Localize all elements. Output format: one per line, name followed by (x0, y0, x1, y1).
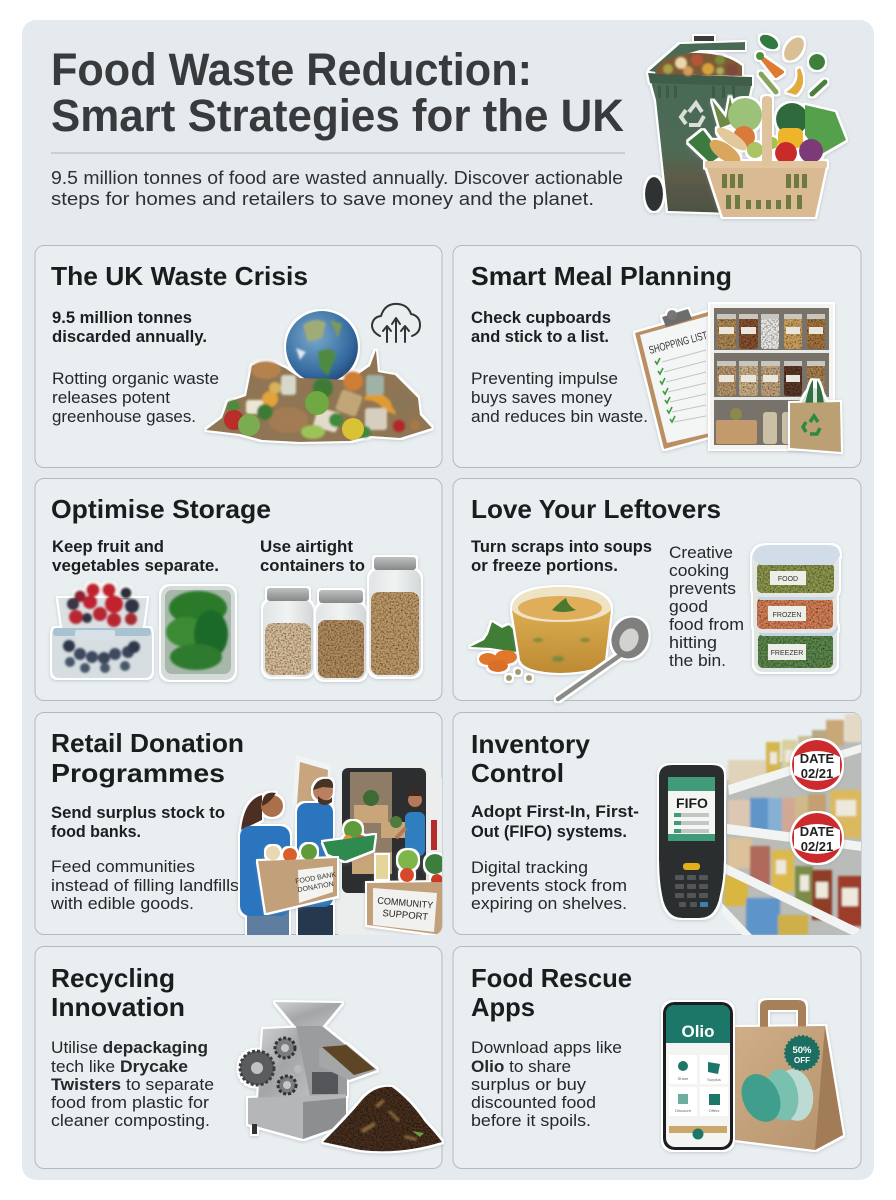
heading (51, 728, 244, 788)
description (52, 370, 219, 426)
illustration: jar of rice (263, 588, 313, 677)
icon: cloud with rising arrows (372, 304, 420, 342)
panel: Inventory Control (453, 712, 862, 940)
icon: shopping basket of vegetables (688, 96, 846, 217)
description (471, 370, 648, 426)
tip: airtight containers (260, 538, 365, 575)
volunteer in van (396, 789, 425, 856)
key fact: or freeze portions. (471, 557, 618, 575)
description: food from (669, 616, 744, 634)
description: greenhouse gases. (52, 408, 196, 426)
description: prevents (669, 580, 736, 598)
illustration: Olio phone app: Surplus (707, 1077, 721, 1082)
description: food from plastic for (51, 1094, 210, 1112)
heading (51, 963, 185, 1022)
illustration: handheld FIFO scanner: FIFO (676, 795, 708, 811)
subtitle: steps for homes and retailers to save money and the planet. (51, 188, 594, 209)
box: food bank donation: DONATION (297, 881, 334, 894)
illustration: tall jar of oats (369, 557, 421, 677)
illustration: jar of grains (316, 590, 366, 680)
woman volunteer (240, 793, 290, 935)
panel: Love Your Leftovers (453, 478, 861, 700)
heading: The UK Waste Crisis (51, 261, 308, 291)
description: Preventing impulse (471, 370, 618, 388)
description: good (669, 598, 708, 616)
illustration: reusable recycling bag (790, 380, 841, 452)
badge: 50% off: 50% (792, 1045, 812, 1056)
illustration: stacked freezer tubs: FROZEN (773, 612, 801, 619)
tip: fruit and vegetables: Keep fruit and (52, 538, 164, 556)
panel: Optimise Storage (35, 478, 442, 700)
title: Smart Strategies for the UK (51, 90, 624, 141)
key fact (471, 538, 652, 575)
man volunteer (297, 779, 333, 935)
description (51, 1039, 214, 1130)
illustration: berry containers (52, 583, 152, 678)
key fact: Send surplus stock to (51, 804, 225, 822)
panel: Recycling Innovation (35, 946, 442, 1168)
illustration: donation van and volunteers (240, 755, 445, 935)
illustration: Olio phone app: Olio (681, 1022, 715, 1041)
description: Olio to share (471, 1058, 571, 1076)
illustration: spinach container (161, 586, 235, 680)
description: Digital tracking (471, 859, 588, 877)
description: expiring on shelves. (471, 895, 627, 913)
heading: Apps (471, 992, 535, 1022)
description: releases potent (52, 389, 170, 407)
tip: airtight containers: containers to (260, 557, 365, 575)
illustration: Olio phone app: Offers (709, 1108, 719, 1113)
tip: fruit and vegetables: vegetables separate. (52, 557, 219, 575)
description (50, 858, 239, 913)
illustration: pantry shelves with jars (710, 304, 833, 449)
description: before it spoils. (471, 1112, 591, 1130)
icon: floating food scraps (756, 32, 825, 95)
panel: Smart Meal Planning (453, 246, 861, 468)
box: community support: COMMUNITY (377, 896, 434, 911)
key fact: Out (FIFO) systems. (471, 823, 627, 841)
tip: airtight containers: Use airtight (260, 538, 354, 556)
description: surplus or buy (471, 1076, 587, 1094)
badge: date label upper: DATE (800, 751, 835, 766)
heading: Inventory (471, 729, 591, 759)
description: tech like Drycake (51, 1058, 188, 1076)
badge: 50% off (785, 1036, 819, 1070)
key fact: 9.5 million tonnes (52, 309, 192, 327)
illustration: shopping list clipboard: SHOPPING LIST (648, 330, 709, 357)
description: cleaner composting. (51, 1112, 210, 1130)
heading (471, 729, 591, 788)
panel: Retail Donation Programmes (35, 712, 445, 935)
description (471, 1039, 622, 1130)
subtitle (51, 167, 623, 209)
panel: The UK Waste Crisis (35, 246, 442, 468)
illustration: stacked freezer tubs: FOOD (778, 576, 798, 583)
icon: recycling symbol on bin (681, 103, 704, 125)
heading: Innovation (51, 992, 185, 1022)
badge: date label upper (792, 740, 842, 790)
illustration: supermarket shelves (722, 714, 862, 940)
heading: Retail Donation (51, 728, 244, 758)
illustration: spoon (558, 611, 655, 699)
van (290, 755, 443, 935)
illustration: Olio phone app (663, 1002, 733, 1150)
illustration: food waste pile under globe (206, 311, 432, 442)
title (51, 44, 624, 141)
illustration: Olio phone app: Discount (675, 1108, 692, 1113)
green crate of produce (323, 821, 375, 861)
description: Feed communities (51, 858, 195, 876)
illustration: Olio phone app: Share (678, 1076, 689, 1081)
description: Rotting organic waste (52, 370, 219, 388)
illustration: depackaging machine (240, 1002, 377, 1139)
key fact (51, 804, 225, 841)
illustration: kraft paper bag (734, 1000, 843, 1150)
badge: date label lower: 02/21 (801, 839, 833, 854)
description: Download apps like (471, 1039, 622, 1057)
description: with edible goods. (50, 895, 194, 913)
box: food bank donation (258, 844, 337, 913)
description: discounted food (471, 1094, 596, 1112)
description: and reduces bin waste. (471, 408, 648, 426)
panel: Food Rescue Apps (453, 946, 861, 1168)
badge: date label lower: DATE (800, 824, 835, 839)
illustration: handheld FIFO scanner (659, 765, 724, 918)
badge: 50% off: OFF (794, 1056, 810, 1065)
description: prevents stock from (471, 877, 627, 895)
description: Utilise depackaging (51, 1039, 208, 1057)
illustration: stacked freezer tubs: FREEZER (771, 650, 803, 657)
illustration: parsley and carrots (470, 622, 532, 681)
key fact: and stick to a list. (471, 328, 609, 346)
description: Twisters to separate (51, 1076, 214, 1094)
key fact: discarded annually. (52, 328, 207, 346)
badge: date label lower (792, 813, 842, 863)
heading: Food Rescue (471, 963, 632, 993)
heading: Love Your Leftovers (471, 494, 721, 524)
icon: wheelie bin with food (645, 36, 752, 213)
description: instead of filling landfills (51, 877, 239, 895)
description: Creative (669, 544, 733, 562)
heading: Programmes (51, 758, 225, 788)
logo: leaf mark (734, 1066, 817, 1128)
description (669, 544, 744, 670)
key fact (471, 309, 611, 346)
illustration: compost pile (323, 1087, 442, 1151)
title: Food Waste Reduction: (51, 44, 532, 95)
description: cooking (669, 562, 729, 580)
box: community support (367, 850, 445, 935)
description: the bin. (669, 652, 726, 670)
illustration: stacked freezer tubs (752, 545, 840, 672)
key fact: Turn scraps into soups (471, 538, 652, 556)
box: community support: SUPPORT (382, 908, 429, 923)
heading: Recycling (51, 963, 175, 993)
heading (471, 963, 632, 1022)
tip: fruit and vegetables (52, 538, 219, 575)
key fact (52, 309, 207, 346)
box: food bank donation: FOOD BANK (295, 871, 337, 886)
subtitle: 9.5 million tonnes of food are wasted annually. Discover actionable (51, 167, 623, 188)
key fact (471, 803, 639, 841)
illustration: tub of soup (512, 587, 611, 673)
key fact: Adopt First-In, First- (471, 803, 639, 821)
heading: Smart Meal Planning (471, 261, 732, 291)
heading: Optimise Storage (51, 494, 271, 524)
key fact: food banks. (51, 823, 141, 841)
description (471, 859, 627, 913)
heading: Control (471, 758, 564, 788)
key fact: Check cupboards (471, 309, 611, 327)
illustration: shopping list clipboard (635, 309, 712, 449)
description: hitting (669, 634, 717, 652)
badge: date label upper: 02/21 (801, 766, 833, 781)
description: buys saves money (471, 389, 613, 407)
